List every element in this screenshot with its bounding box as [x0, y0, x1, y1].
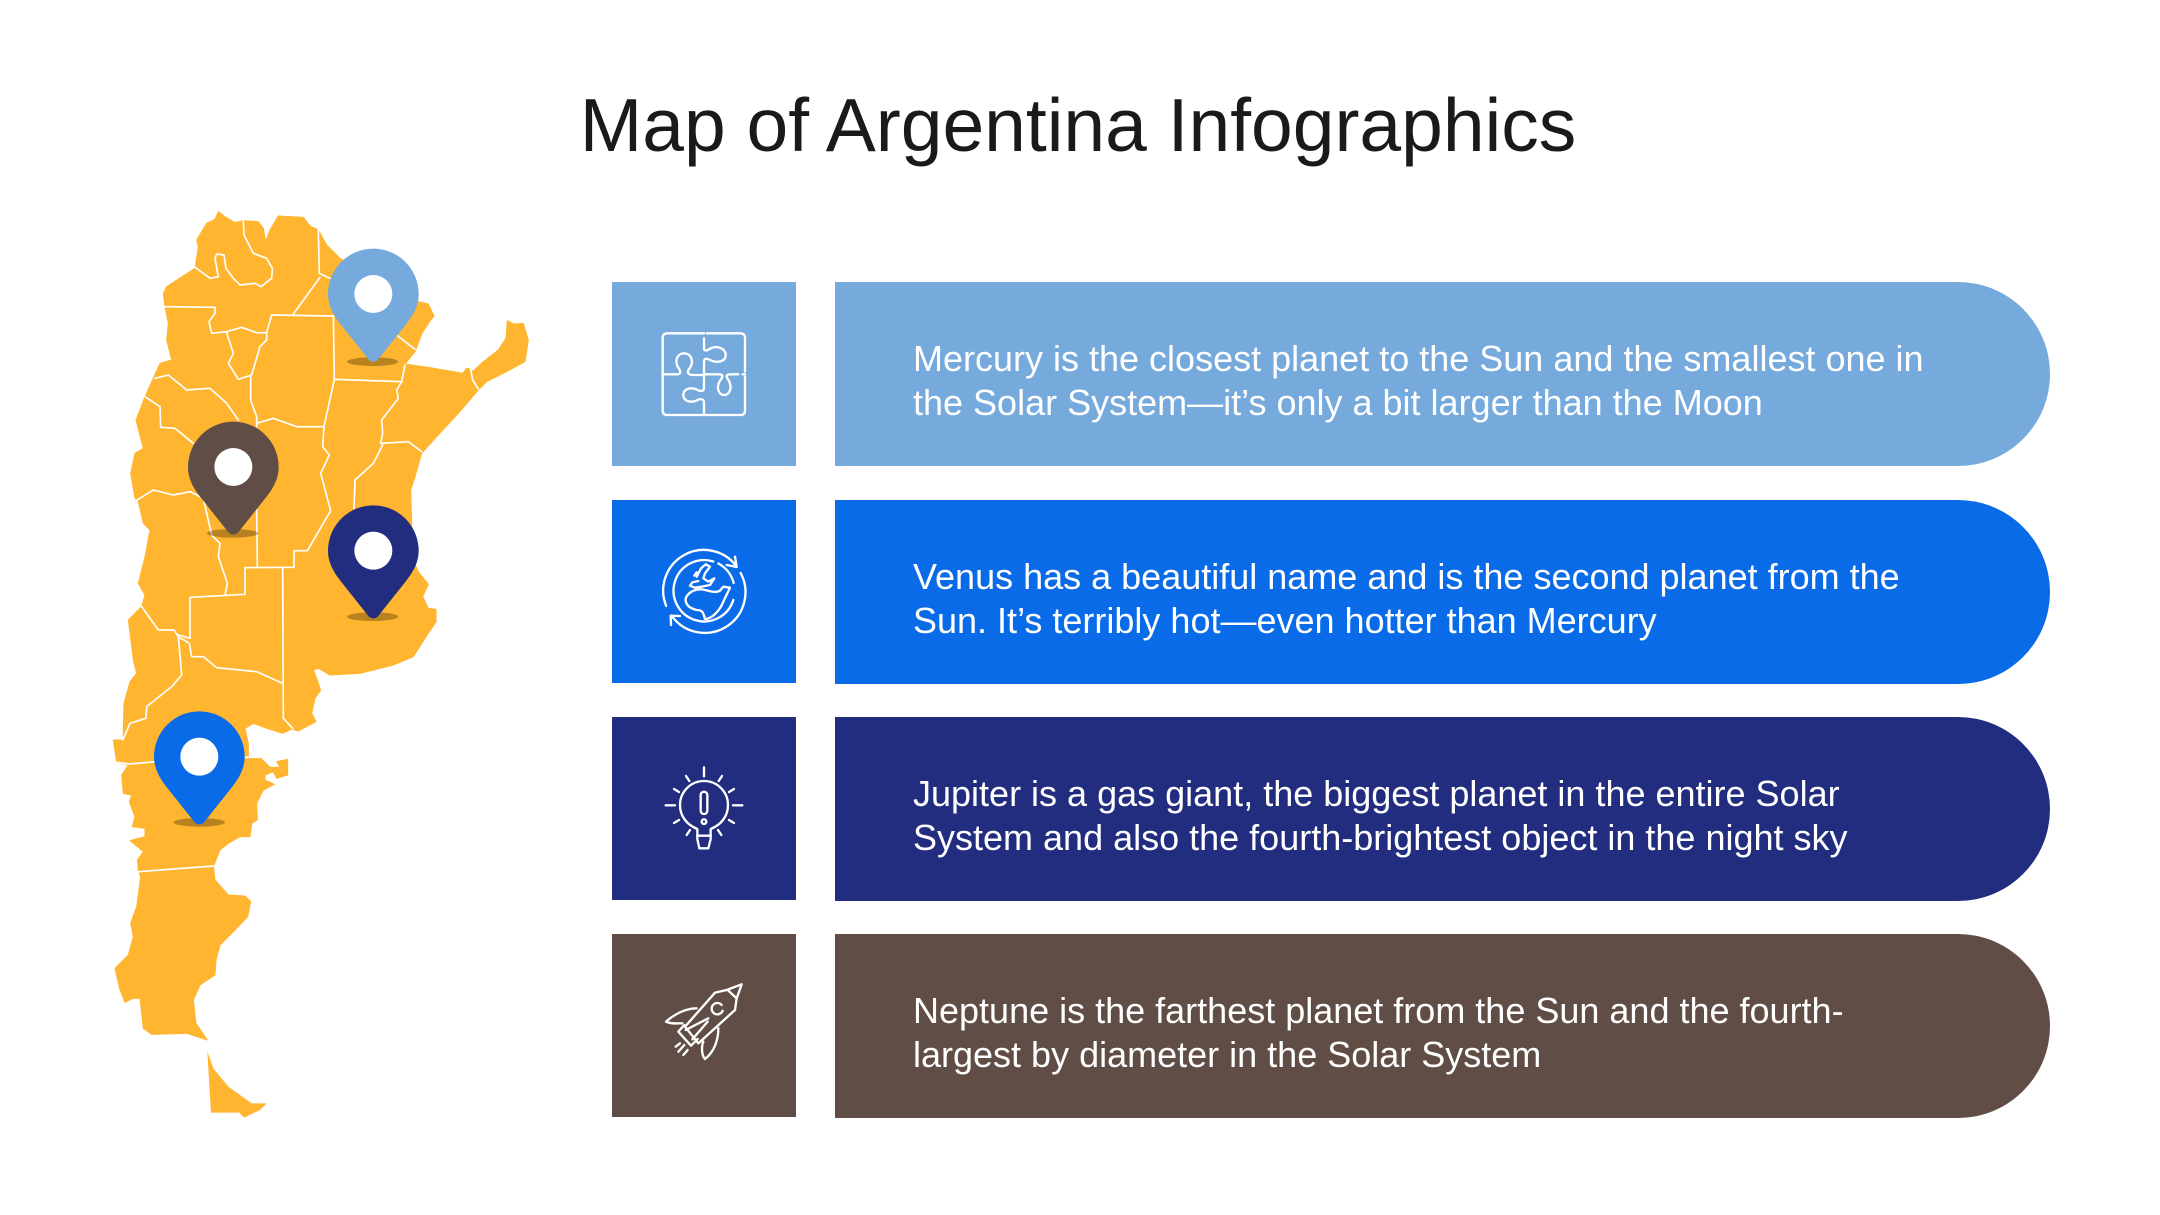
pin: light blue: [328, 249, 419, 366]
map of Argentina with pins: [112, 211, 529, 1118]
panel: text bar, Mercury: [835, 282, 2050, 466]
icon: puzzle: [662, 332, 746, 416]
icon: rotating globe: [662, 548, 747, 634]
panel: icon square, Mercury: [612, 282, 796, 466]
text: Mercury: the Solar System—it’s only a bit larger than the Moon: [913, 382, 1763, 422]
pin: bright blue: [154, 711, 245, 827]
panel: text bar, Neptune: [835, 934, 2050, 1118]
pin: brown: [188, 422, 279, 538]
text: Jupiter: [913, 773, 1848, 858]
text: Venus: [913, 556, 1900, 640]
title: Map of Argentina Infographics: [580, 83, 1576, 167]
text: Jupiter: System and also the fourth-brightest object in the night sky: [913, 816, 1848, 858]
panel: text bar, Jupiter: [835, 717, 2050, 901]
panel: icon square, Venus: [612, 500, 796, 683]
panel: icon square, Neptune: [612, 934, 796, 1117]
pin: navy: [328, 505, 419, 621]
text: Neptune: [913, 990, 1844, 1074]
text: Venus: Venus has a beautiful name and is the second planet from the: [913, 556, 1900, 597]
text: Neptune: largest by diameter in the Solar System: [913, 1034, 1541, 1074]
panel: icon square, Jupiter: [612, 717, 796, 900]
map: Tierra del Fuego: [207, 1052, 267, 1118]
text: Venus: Sun. It’s terribly hot—even hotter than Mercury: [913, 600, 1657, 640]
icon: light bulb: [664, 766, 744, 850]
text: Jupiter: Jupiter is a gas giant, the biggest planet in the entire Solar: [913, 773, 1840, 814]
icon: rocket: [664, 983, 743, 1060]
text: Mercury: Mercury is the closest planet to the Sun and the smallest one in: [913, 338, 1924, 379]
text: Neptune: Neptune is the farthest planet from the Sun and the fourth-: [913, 990, 1844, 1031]
text: Mercury: [913, 338, 1924, 422]
map: province borders: [117, 221, 478, 872]
map: country silhouette: [113, 212, 528, 1040]
panel: text bar, Venus: [835, 500, 2050, 684]
